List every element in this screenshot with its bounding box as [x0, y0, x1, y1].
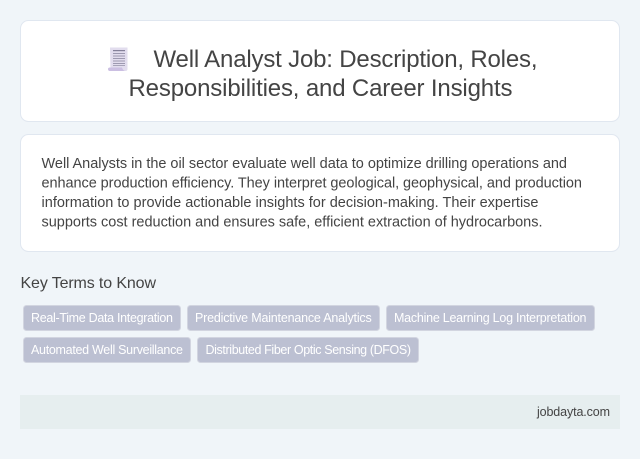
tag: predictive maintenance analytics: [188, 306, 380, 330]
text block: description: information to provide actionable insights for decision-making. Their expertise: [42, 195, 538, 211]
tag: automated well surveillance: [24, 338, 190, 362]
text block: description: [42, 156, 582, 230]
tag: machine learning log interpretation: Machine Learning Log Interpretation: [394, 311, 587, 325]
footer text: source: jobdayta.com: [536, 405, 610, 419]
text block: description: supports cost reduction and ensures safe, efficient extraction of hydrocarbons.: [42, 214, 542, 230]
icon: document scroll: [108, 48, 128, 71]
footer bar: [20, 395, 620, 429]
heading: key terms: Key Terms to Know: [20, 275, 156, 292]
tag: distributed fiber optic sensing: Distributed Fiber Optic Sensing (DFOS): [206, 343, 411, 357]
tag: machine learning log interpretation: [386, 306, 594, 330]
tag: real-time data integration: Real-Time Data Integration: [31, 311, 173, 325]
tag: automated well surveillance: Automated Well Surveillance: [31, 343, 183, 357]
tag: predictive maintenance analytics: Predictive Maintenance Analytics: [195, 311, 372, 325]
heading: title: Well Analyst Job: Description, Roles,: [154, 46, 538, 73]
tag: real-time data integration: [24, 306, 180, 330]
tag group: key terms: [24, 306, 594, 362]
panel: description card: [20, 134, 620, 252]
heading: title: [128, 46, 538, 102]
panel: title card: [20, 20, 620, 122]
text block: description: Well Analysts in the oil sector evaluate well data to optimize drilling operations and: [42, 156, 567, 172]
heading: title: Responsibilities, and Career Insights: [128, 75, 512, 102]
text block: description: enhance production efficiency. They interpret geological, geophysical, and production: [42, 176, 582, 192]
tag: distributed fiber optic sensing: [198, 338, 418, 362]
